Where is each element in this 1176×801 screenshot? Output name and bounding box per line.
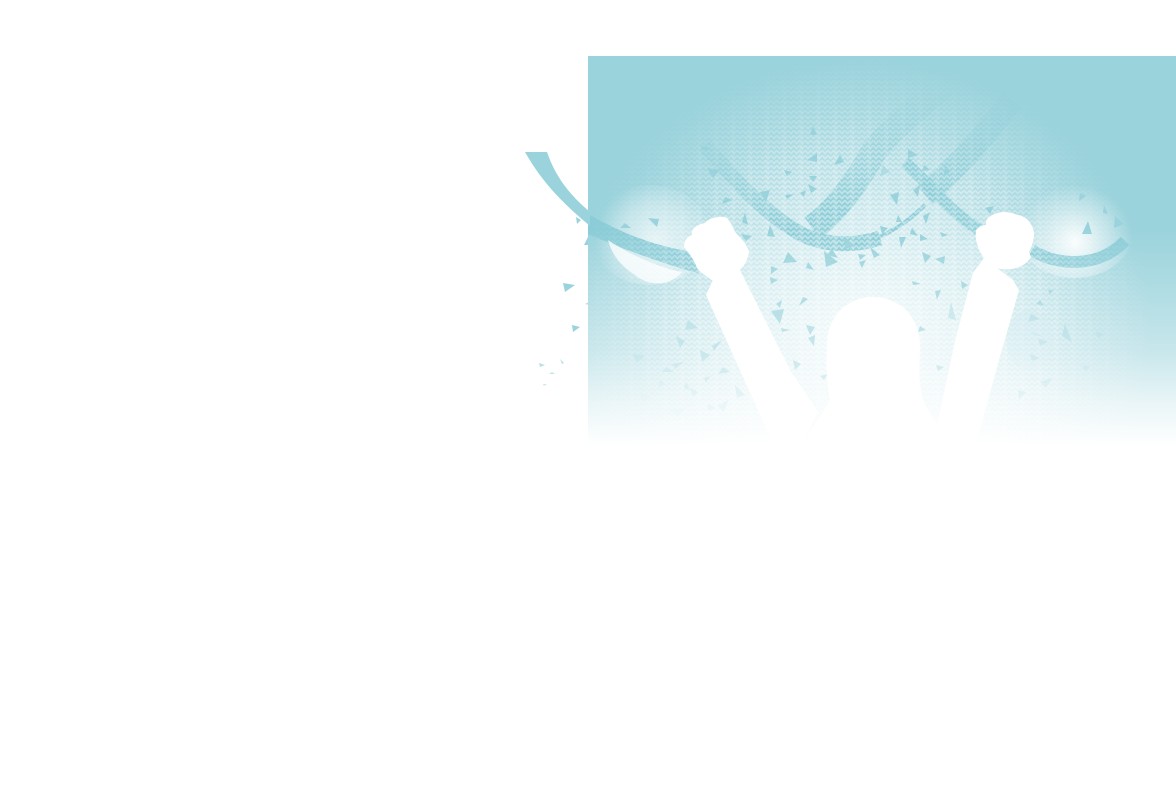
ribbons: [705, 80, 1125, 262]
knit texture: [598, 80, 1119, 392]
ribbon: rising band: [812, 80, 950, 228]
light spot behind right fist: [1017, 186, 1133, 278]
ribbon: crossing band: [905, 162, 985, 234]
figure silhouette: [684, 212, 1034, 448]
ribbon: second rising band: [925, 100, 1012, 195]
ribbon: left band: [588, 214, 700, 274]
ribbon: centre left swoop: [705, 145, 880, 244]
teal panel background: [588, 56, 1176, 446]
ribbon: thin edge line: [850, 205, 925, 247]
confetti triangles: [539, 126, 1124, 418]
illustration: celebrating figure: [525, 56, 1176, 430]
right arm: [932, 258, 1019, 448]
bottom fade to white: [588, 230, 1176, 448]
left fist: [684, 217, 749, 281]
ribbon tail outside panel: [525, 152, 590, 226]
ribbon: right band: [1032, 241, 1125, 262]
head and torso: [800, 297, 948, 448]
blob behind right arm: [1006, 310, 1054, 370]
soft central glow: [588, 56, 1176, 446]
right fist: [976, 212, 1034, 269]
left arm: [706, 270, 818, 448]
crescent highlight under left ribbon: [608, 240, 682, 283]
light spot behind left fist: [590, 185, 710, 285]
